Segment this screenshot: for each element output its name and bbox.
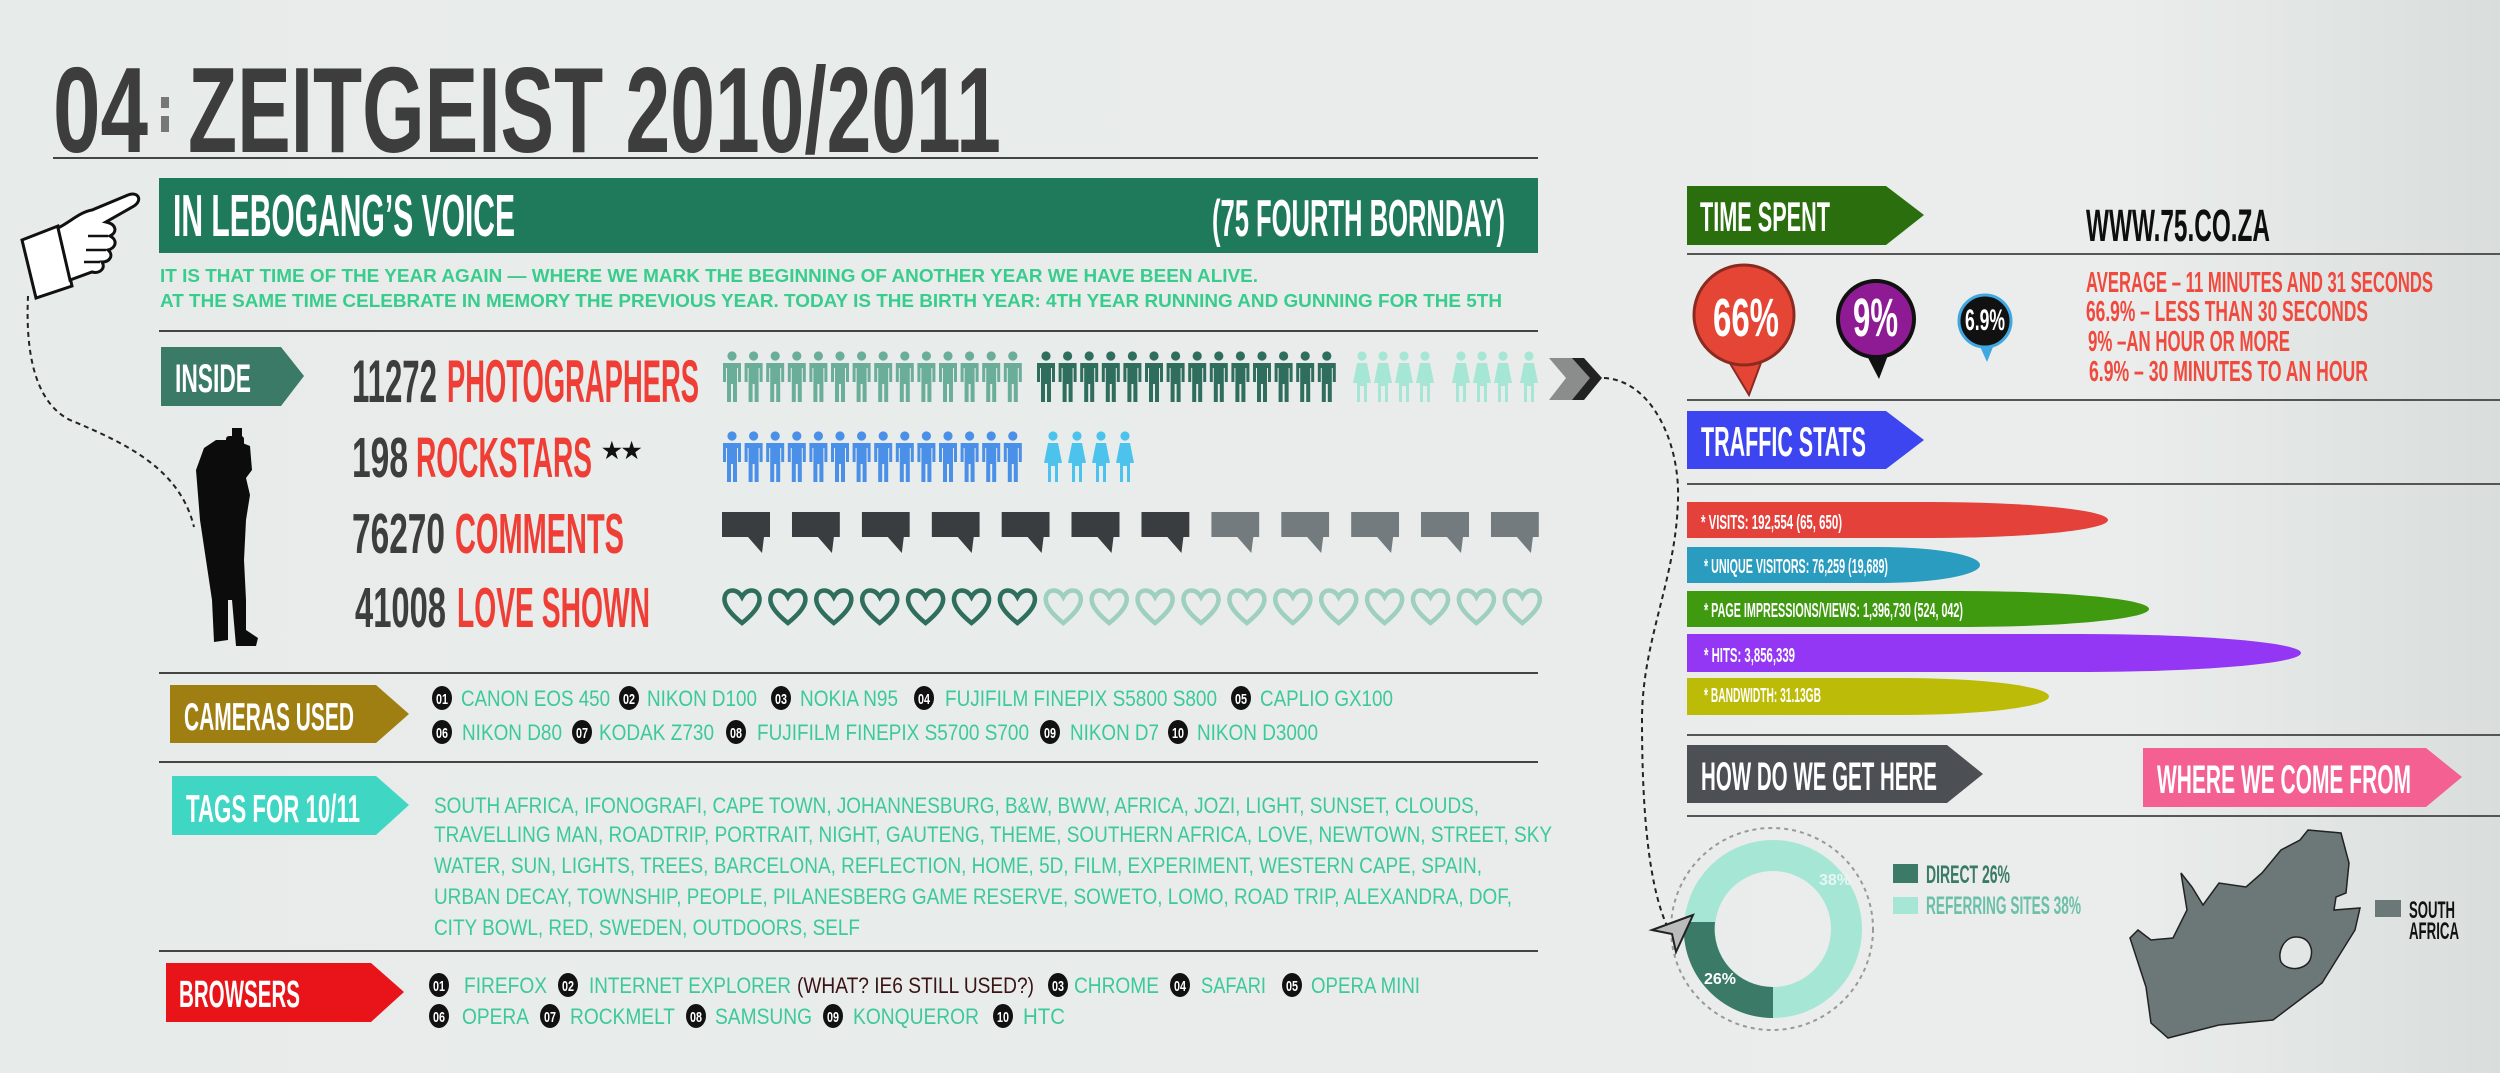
banner: in lebogang's voice: (75 FOURTH BORNDAY) bbox=[1212, 190, 1505, 248]
panel: cameras used: 10 bbox=[1172, 725, 1184, 742]
title: ZEITGEIST 2010/2011 bbox=[188, 42, 1001, 178]
icon: chevron arrow bbox=[1549, 358, 1602, 400]
stat: photographers: PHOTOGRAPHERS bbox=[447, 348, 699, 415]
tag: inside: INSIDE bbox=[175, 357, 251, 401]
panel: browsers: 06 bbox=[433, 1009, 445, 1026]
panel: tags: CITY BOWL, RED, SWEDEN, OUTDOORS, SELF bbox=[434, 915, 860, 940]
stat: photographers: 11272 bbox=[352, 348, 437, 415]
panel: tags: TRAVELLING MAN, ROADTRIP, PORTRAIT, NIGHT, GAUTENG, THEME, SOUTHERN AFRICA, LOVE, NEWTOWN, STREET, SKY bbox=[434, 822, 1552, 847]
bubble: 66% bbox=[1694, 265, 1794, 395]
panel: browsers: HTC bbox=[1023, 1004, 1065, 1029]
panel: cameras used: NIKON D80 bbox=[462, 720, 562, 745]
panel: browsers: OPERA bbox=[462, 1004, 529, 1029]
time spent details: 9% –AN HOUR OR MORE bbox=[2088, 326, 2290, 358]
tag: how do we get here: HOW DO WE GET HERE bbox=[1701, 755, 1937, 799]
panel: cameras used: 05 bbox=[1235, 691, 1247, 708]
panel: cameras used: 07 bbox=[576, 725, 588, 742]
stat: love shown: 41008 bbox=[355, 576, 446, 640]
panel: browsers: 10 bbox=[997, 1009, 1009, 1026]
banner: in lebogang's voice bbox=[159, 178, 1538, 253]
title: 04 bbox=[53, 42, 148, 178]
panel: cameras used: CANON EOS 450 bbox=[461, 686, 610, 711]
panel: tags: TAGS FOR 10/11 bbox=[186, 788, 360, 831]
map legend: AFRICA bbox=[2409, 918, 2459, 945]
tag: time spent bbox=[1687, 186, 1924, 245]
stat: rockstars: ROCKSTARS bbox=[416, 426, 592, 490]
bubble: 66%: 66% bbox=[1713, 288, 1779, 348]
bar chart: traffic: * VISITS: 192,554 (65, 650) bbox=[1701, 512, 1842, 534]
panel: cameras used: FUJIFILM FINEPIX S5800 S800 bbox=[945, 686, 1217, 711]
panel: browsers: SAFARI bbox=[1201, 973, 1266, 998]
panel: browsers: 04 bbox=[1174, 978, 1186, 995]
tag: where we come from bbox=[2143, 748, 2462, 807]
dashed path left bbox=[28, 296, 194, 527]
panel: browsers: KONQUEROR bbox=[853, 1004, 979, 1029]
panel: cameras used: CAPLIO GX100 bbox=[1260, 686, 1393, 711]
panel: browsers: BROWSERS bbox=[179, 974, 300, 1016]
panel: cameras used: NIKON D7 bbox=[1070, 720, 1159, 745]
panel: browsers: (WHAT? IE6 STILL USED?) bbox=[797, 973, 1034, 998]
donut chart: 26% bbox=[1704, 971, 1736, 988]
intro text: IT IS THAT TIME OF THE YEAR AGAIN — WHERE WE MARK THE BEGINNING OF ANOTHER YEAR WE HAVE BEEN ALIVE. bbox=[160, 266, 1258, 286]
stat: rockstars: 198 bbox=[352, 426, 408, 490]
panel: tags: URBAN DECAY, TOWNSHIP, PEOPLE, PILANESBERG GAME RESERVE, SOWETO, LOMO, ROAD TRIP, ALEXANDRA, DOF, bbox=[434, 884, 1512, 909]
donut legend: DIRECT 26% bbox=[1926, 861, 2010, 889]
panel: tags bbox=[172, 776, 1552, 940]
map legend bbox=[2375, 897, 2459, 945]
donut chart: 38% bbox=[1819, 872, 1851, 889]
panel: cameras used: NIKON D100 bbox=[647, 686, 757, 711]
panel: cameras used: 04 bbox=[918, 691, 930, 708]
banner: in lebogang's voice: IN LEBOGANG’S VOICE bbox=[173, 183, 515, 249]
panel: tags: WATER, SUN, LIGHTS, TREES, BARCELONA, REFLECTION, HOME, 5D, FILM, EXPERIMENT, WESTERN CAPE, SPAIN, bbox=[434, 853, 1482, 878]
panel: cameras used: 01 bbox=[436, 691, 448, 708]
stat: comments bbox=[352, 502, 1539, 566]
panel: cameras used: 03 bbox=[775, 691, 787, 708]
icon: photographer silhouette bbox=[196, 428, 258, 646]
website url: WWW.75.CO.ZA bbox=[2086, 200, 2270, 251]
bubble: 9% bbox=[1838, 281, 1914, 379]
panel: browsers: OPERA MINI bbox=[1311, 973, 1420, 998]
stat: love shown: LOVE SHOWN bbox=[457, 576, 650, 640]
panel: tags: SOUTH AFRICA, IFONOGRAFI, CAPE TOWN, JOHANNESBURG, B&W, BWW, AFRICA, JOZI, LIGHT, SUNSET, CLOUDS, bbox=[434, 793, 1479, 818]
intro text: AT THE SAME TIME CELEBRATE IN MEMORY THE PREVIOUS YEAR. TODAY IS THE BIRTH YEAR: 4TH YEAR RUNNING AND GUNNING FOR THE 5TH bbox=[160, 291, 1502, 311]
panel: browsers: FIREFOX bbox=[464, 973, 547, 998]
panel: cameras used: 06 bbox=[436, 725, 448, 742]
bar chart: traffic: * BANDWIDTH: 31.13GB bbox=[1704, 685, 1821, 707]
time spent details bbox=[2086, 267, 2433, 388]
panel: cameras used: 08 bbox=[730, 725, 742, 742]
map legend: SOUTH bbox=[2409, 897, 2455, 924]
panel: browsers: 05 bbox=[1286, 978, 1298, 995]
panel: browsers: ROCKMELT bbox=[570, 1004, 675, 1029]
bar chart: traffic bbox=[1687, 502, 2301, 715]
title bbox=[53, 42, 1001, 178]
panel: browsers: 03 bbox=[1052, 978, 1064, 995]
bar chart: traffic: * UNIQUE VISITORS: 76,259 (19,689) bbox=[1704, 556, 1888, 578]
panel: browsers: 08 bbox=[690, 1009, 702, 1026]
panel: browsers: SAMSUNG bbox=[715, 1004, 812, 1029]
panel: cameras used: NOKIA N95 bbox=[800, 686, 898, 711]
panel: cameras used: KODAK Z730 bbox=[599, 720, 714, 745]
intro text bbox=[160, 266, 1502, 311]
tag: traffic stats: TRAFFIC STATS bbox=[1701, 418, 1866, 465]
dashed path right bbox=[1604, 378, 1678, 928]
tag: how do we get here bbox=[1687, 745, 1983, 803]
donut legend: REFERRING SITES 38% bbox=[1926, 892, 2081, 920]
tag: traffic stats bbox=[1687, 411, 1924, 469]
stat: photographers bbox=[352, 348, 1538, 415]
panel: cameras used: 09 bbox=[1044, 725, 1056, 742]
bubble: 9%: 9% bbox=[1853, 288, 1898, 348]
panel: browsers: 09 bbox=[827, 1009, 839, 1026]
icon: paper plane bbox=[1652, 915, 1693, 952]
map: south africa bbox=[2130, 830, 2360, 1038]
panel: browsers: 07 bbox=[544, 1009, 556, 1026]
bubble: 6.9%: 6.9% bbox=[1965, 304, 2005, 337]
bar chart: traffic: * HITS: 3,856,339 bbox=[1704, 645, 1795, 667]
panel: browsers bbox=[166, 963, 1420, 1029]
panel: browsers: INTERNET EXPLORER bbox=[589, 973, 791, 998]
stat: rockstars: ★★ bbox=[602, 438, 642, 463]
panel: cameras used: CAMERAS USED bbox=[184, 696, 354, 739]
stat: love shown bbox=[355, 576, 1540, 640]
icon: pointing hand bbox=[22, 194, 139, 298]
donut legend bbox=[1893, 861, 2081, 920]
bar chart: traffic: * PAGE IMPRESSIONS/VIEWS: 1,396,730 (524, 042) bbox=[1704, 600, 1963, 622]
panel: browsers: 02 bbox=[562, 978, 574, 995]
bubble: 6.9% bbox=[1959, 295, 2011, 362]
stat: comments: COMMENTS bbox=[455, 502, 624, 566]
panel: cameras used: NIKON D3000 bbox=[1197, 720, 1318, 745]
panel: cameras used: FUJIFILM FINEPIX S5700 S700 bbox=[757, 720, 1029, 745]
tag: time spent: TIME SPENT bbox=[1700, 193, 1830, 240]
tag: inside bbox=[161, 347, 304, 406]
panel: browsers: 01 bbox=[433, 978, 445, 995]
donut chart bbox=[1671, 828, 1873, 1030]
panel: cameras used bbox=[170, 685, 1393, 745]
panel: browsers: CHROME bbox=[1074, 973, 1159, 998]
panel: cameras used: 02 bbox=[623, 691, 635, 708]
stat: rockstars bbox=[352, 426, 1134, 490]
stat: comments: 76270 bbox=[352, 502, 445, 566]
